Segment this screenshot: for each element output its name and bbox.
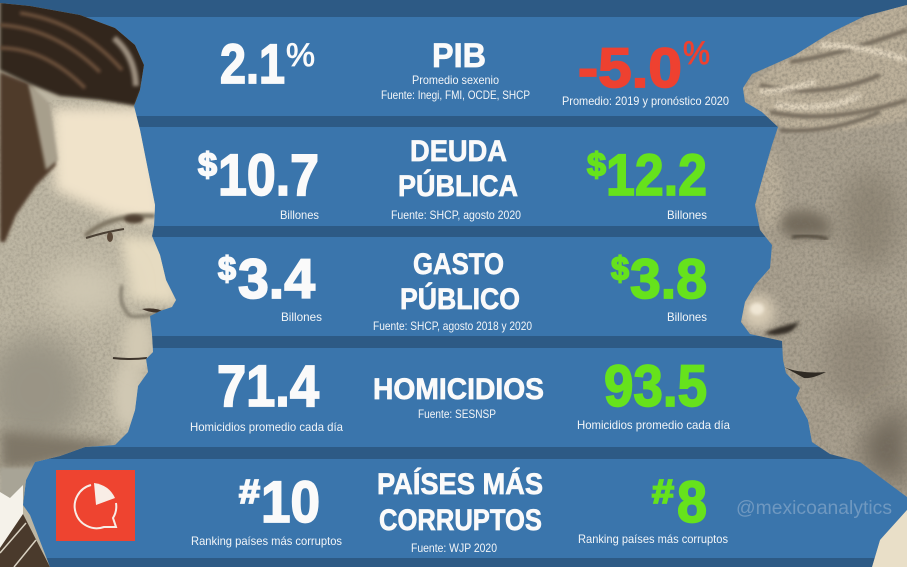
row: Gasto público: Billones: [667, 310, 707, 324]
row: Gasto público: PÚBLICO: [400, 282, 520, 316]
nostril: [121, 285, 166, 316]
hair: [0, 0, 150, 106]
row: Países más corruptos: #: [652, 473, 674, 510]
row: Países más corruptos: PAÍSES MÁS: [377, 467, 543, 501]
row: Homicidios: Homicidios promedio cada día: [577, 418, 730, 432]
row: Gasto público: 3.8: [630, 247, 707, 310]
eye: [86, 229, 124, 242]
row: Homicidios: HOMICIDIOS: [373, 373, 544, 406]
row: Deuda pública: PÚBLICA: [398, 169, 518, 203]
value: -5.0%: -5.0: [578, 36, 682, 99]
heading: PIB: [432, 37, 486, 75]
icon: logo pie chart speech bubble: [56, 470, 135, 541]
row: PIB: Promedio sexenio: [412, 73, 499, 87]
row: Homicidios: [190, 354, 730, 434]
mouth: [113, 358, 147, 359]
row: Deuda pública: 10.7: [218, 143, 319, 208]
row: Países más corruptos: Ranking países más corruptos: [191, 534, 342, 548]
row: PIB: %: [286, 37, 315, 73]
row: Deuda pública: Fuente: SHCP, agosto 2020: [391, 208, 521, 222]
tie: [0, 514, 50, 567]
portrait: right politician: [735, 0, 907, 567]
face shading: [840, 170, 900, 270]
row: PIB: [220, 32, 729, 108]
shoulder: [872, 505, 907, 567]
row: Homicidios: 71.4: [217, 354, 319, 419]
collar: [0, 485, 23, 548]
temple grey: [28, 82, 58, 170]
forehead and nose light areas: [52, 108, 165, 225]
row: Países más corruptos: #: [239, 473, 260, 510]
value: 2.1%: 2.1: [220, 32, 285, 95]
row: Gasto público: Billones: [281, 310, 322, 324]
row: Gasto público: $: [218, 250, 236, 287]
row: PIB: Promedio: 2019 y pronóstico 2020: [562, 94, 729, 108]
row: Países más corruptos: 10: [261, 470, 320, 535]
eye: [792, 236, 828, 239]
portrait: left politician: [0, 0, 180, 567]
row: Deuda pública: 12.2: [606, 143, 707, 208]
row: Gasto público: [218, 247, 707, 333]
skin grain: [0, 100, 170, 466]
row: Deuda pública: Billones: [667, 208, 707, 222]
row: Gasto público: Fuente: SHCP, agosto 2018 y 2020: [373, 319, 532, 333]
row: Homicidios: Fuente: SESNSP: [418, 407, 496, 421]
nostril: [764, 322, 800, 335]
mouth: [784, 367, 826, 378]
row: Gasto público: GASTO: [413, 248, 504, 281]
nose highlight: [741, 295, 775, 329]
row: Gasto público: $: [611, 250, 629, 287]
skin grain: [735, 0, 907, 500]
row: Deuda pública: $: [587, 146, 606, 183]
row: Países más corruptos: Fuente: WJP 2020: [411, 541, 497, 555]
row: Gasto público: 3.4: [238, 247, 315, 310]
row: Países más corruptos: Ranking países más corruptos: [578, 532, 728, 546]
row: Homicidios: Homicidios promedio cada día: [190, 420, 343, 434]
row: Deuda pública: [198, 135, 707, 222]
row: PIB: %: [683, 35, 710, 71]
row: Países más corruptos: [191, 467, 728, 555]
row: Países más corruptos: CORRUPTOS: [379, 504, 542, 537]
row: Deuda pública: Billones: [280, 208, 319, 222]
row: Países más corruptos: 8: [677, 470, 707, 535]
sideburn: [0, 72, 56, 242]
row: Homicidios: 93.5: [604, 354, 707, 419]
eyebrow: [85, 216, 155, 236]
watermark: @mexicoanalytics: [736, 497, 892, 519]
row: Deuda pública: DEUDA: [410, 135, 507, 168]
row: PIB: Fuente: Inegi, FMI, OCDE, SHCP: [381, 88, 530, 102]
row: Deuda pública: $: [198, 146, 217, 183]
hair: [740, 0, 907, 132]
